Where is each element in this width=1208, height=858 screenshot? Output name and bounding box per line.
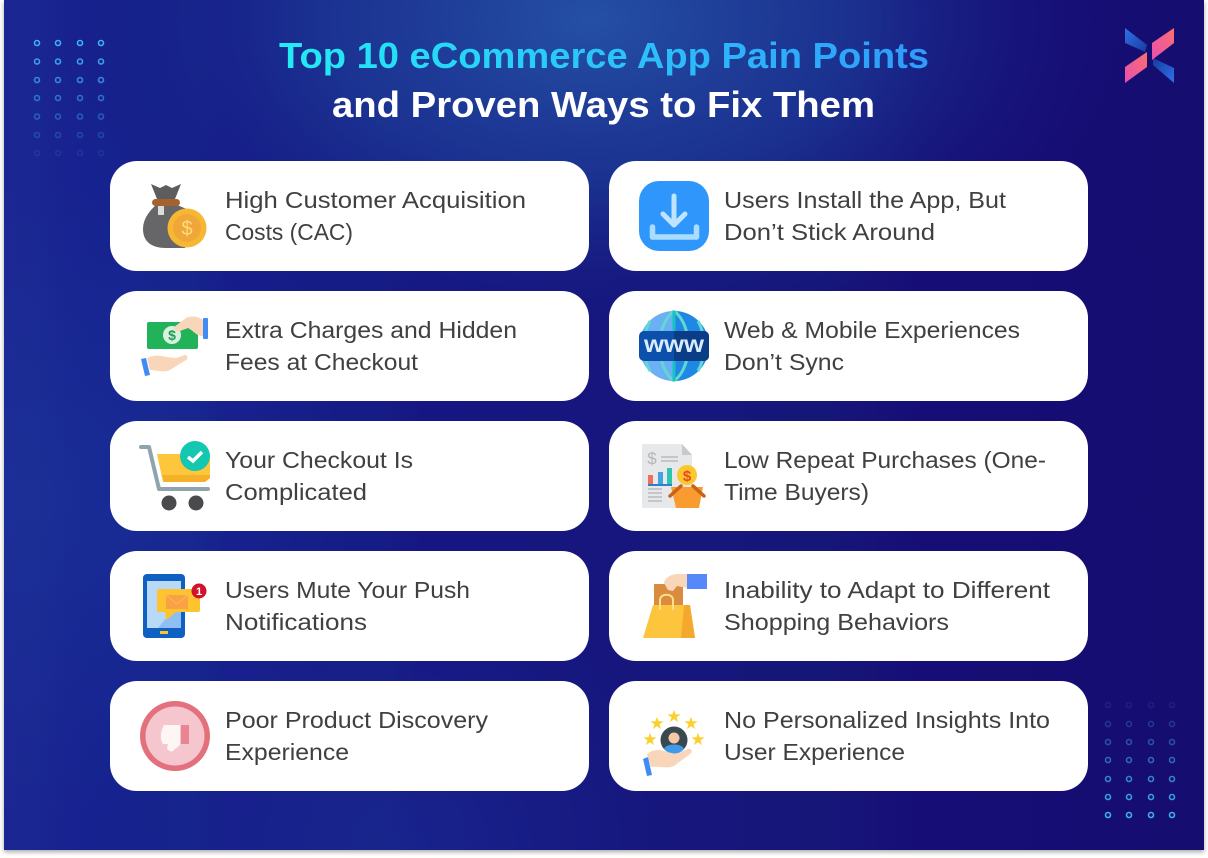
icon: user with stars on hand: ★ [683, 714, 699, 733]
text: Users Install the App, But [724, 187, 1007, 213]
text: Fees at Checkout [225, 349, 419, 375]
text [225, 317, 517, 375]
icon: phone with message notification: 1 [196, 586, 202, 598]
panel: web and mobile don't sync [609, 291, 1088, 401]
icon: download [639, 181, 709, 251]
text: Extra Charges and Hidden [225, 317, 517, 343]
text [225, 187, 526, 245]
panel: high customer acquisition costs [110, 161, 589, 271]
panel: users install but don't stick [609, 161, 1088, 271]
icon: report and basket [642, 444, 704, 508]
icon: user with stars on hand: ★ [649, 714, 665, 733]
panel: checkout is complicated [110, 421, 589, 531]
icon: user with stars on hand [642, 707, 706, 776]
text [225, 707, 489, 765]
text: Inability to Adapt to Different [724, 577, 1051, 603]
icon: shopping cart with check [141, 441, 210, 510]
text [225, 447, 413, 505]
icon: user with stars on hand: ★ [666, 707, 682, 726]
text: High Customer Acquisition [225, 187, 526, 213]
text: Shopping Behaviors [724, 609, 949, 635]
text [724, 707, 1050, 765]
icon: money bag with coin: $ [181, 218, 193, 240]
decorative dots: top left [34, 40, 104, 156]
text: Costs (CAC) [225, 219, 353, 245]
text [724, 577, 1051, 635]
text: Users Mute Your Push [225, 577, 470, 603]
text: Poor Product Discovery [225, 707, 489, 733]
text [724, 447, 1046, 505]
text: Complicated [225, 479, 367, 505]
title [279, 35, 929, 125]
panel: extra charges and hidden fees [110, 291, 589, 401]
icon: money passing between hands: $ [168, 327, 176, 343]
text: Web & Mobile Experiences [724, 317, 1020, 343]
icon: shopping bag and hand [643, 574, 707, 638]
title: and Proven Ways to Fix Them [332, 84, 875, 125]
panel: no personalized insights [609, 681, 1088, 791]
text: Your Checkout Is [225, 447, 413, 473]
icon: thumbs down [140, 701, 210, 771]
icon: globe www: www [643, 331, 704, 357]
panel: inability to adapt [609, 551, 1088, 661]
text [225, 577, 470, 635]
icon: report and basket: $ [683, 468, 692, 485]
icon: user with stars on hand: ★ [690, 730, 706, 749]
icon: money bag with coin [143, 184, 206, 248]
text: Don’t Stick Around [724, 219, 935, 245]
title: Top 10 eCommerce App Pain Points [279, 35, 929, 76]
text [724, 317, 1020, 375]
panel: low repeat purchases [609, 421, 1088, 531]
icon: money passing between hands [141, 317, 208, 376]
logo [1125, 28, 1174, 83]
panel: users mute push notifications [110, 551, 589, 661]
text: Experience [225, 739, 349, 765]
text: No Personalized Insights Into [724, 707, 1050, 733]
text: User Experience [724, 739, 905, 765]
decorative dots: bottom right [1106, 702, 1174, 818]
icon: report and basket: $ [647, 449, 657, 468]
text: Time Buyers) [724, 479, 869, 505]
icon: phone with message notification [143, 574, 206, 638]
text: Low Repeat Purchases (One- [724, 447, 1046, 473]
panel: poor product discovery [110, 681, 589, 791]
text: Don’t Sync [724, 349, 844, 375]
icon: user with stars on hand: ★ [642, 730, 658, 749]
icon: globe www [639, 311, 709, 381]
text: Notifications [225, 609, 367, 635]
text [724, 187, 1007, 245]
